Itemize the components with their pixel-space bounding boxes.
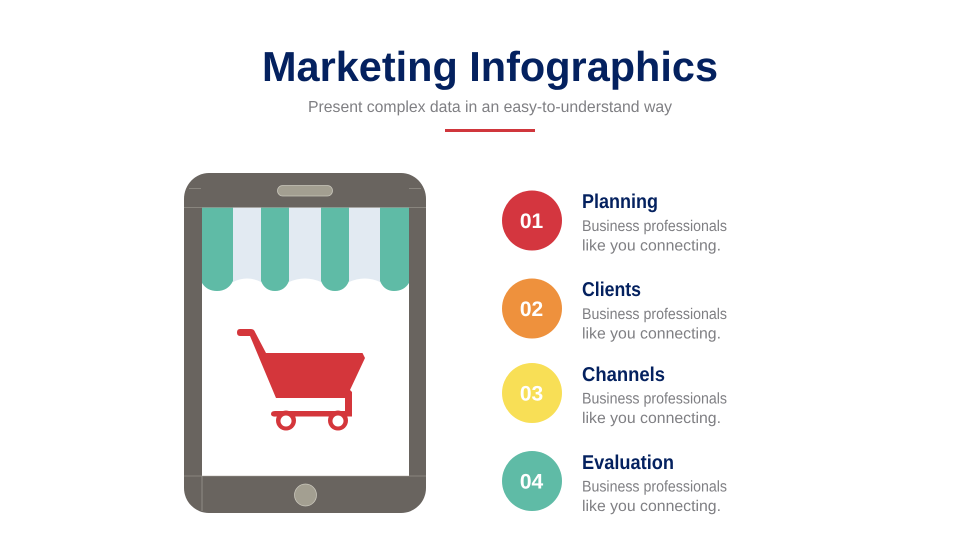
icon: tablet storefront bbox=[184, 173, 426, 513]
badge 02 bbox=[502, 278, 562, 338]
awning bbox=[202, 208, 409, 291]
badge 04 bbox=[502, 451, 562, 511]
item 01: Planning bbox=[502, 190, 727, 254]
title: Marketing Infographics bbox=[262, 43, 718, 90]
subtitle: Present complex data in an easy-to-understand way bbox=[308, 99, 672, 116]
item 02: Clients bbox=[502, 278, 727, 342]
item 04: Evaluation: 04 bbox=[520, 470, 543, 494]
description: Business professionals bbox=[582, 478, 727, 496]
item 02: Clients: 02 bbox=[520, 298, 543, 321]
awning teal stripes bbox=[202, 208, 409, 291]
tablet screen bbox=[202, 208, 409, 476]
title underline bbox=[445, 129, 535, 132]
heading: Clients bbox=[582, 279, 641, 301]
tablet home button bbox=[294, 484, 316, 506]
tablet speaker bbox=[278, 186, 332, 196]
item 03: Channels bbox=[502, 363, 727, 427]
heading: Channels bbox=[582, 364, 665, 386]
description: Business professionals bbox=[582, 218, 727, 235]
description: Business professionals bbox=[582, 306, 727, 323]
tablet seam lines bbox=[184, 188, 426, 511]
badge 03 bbox=[502, 363, 562, 423]
item 01: Planning: like you connecting. bbox=[582, 238, 721, 254]
description: Business professionals bbox=[582, 390, 727, 408]
item 03: Channels: like you connecting. bbox=[582, 410, 721, 427]
item 04: Evaluation bbox=[502, 451, 727, 515]
tablet body bbox=[184, 173, 426, 513]
badge 01 bbox=[502, 190, 562, 250]
heading: Evaluation bbox=[582, 452, 674, 474]
item 02: Clients: like you connecting. bbox=[582, 326, 721, 342]
heading: Planning bbox=[582, 191, 658, 213]
awning light stripes bbox=[233, 208, 380, 282]
icon: shopping cart bbox=[237, 329, 365, 430]
item 01: Planning: 01 bbox=[520, 210, 543, 233]
item 04: Evaluation: like you connecting. bbox=[582, 498, 721, 515]
item 03: Channels: 03 bbox=[520, 382, 543, 406]
